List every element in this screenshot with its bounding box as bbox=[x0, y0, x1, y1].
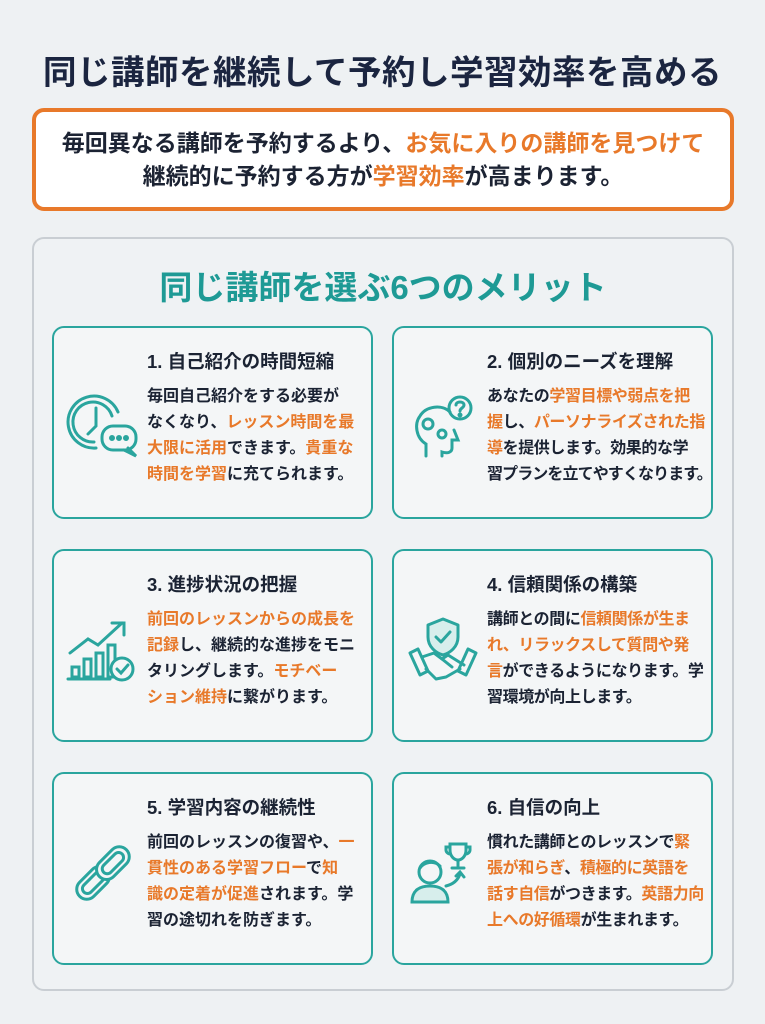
card 3 text: タリングします。モチベー bbox=[147, 663, 337, 680]
card 4 text: れ、リラックスして質問や発 bbox=[487, 637, 689, 654]
intro callout: 毎回異なる講師を予約するより、お気に入りの講師を見つけて bbox=[62, 130, 704, 156]
card 6 bbox=[392, 772, 713, 965]
card 5 text: 識の定着が促進されます。学 bbox=[147, 886, 353, 903]
card 1 text: 時間を学習に充てられます。 bbox=[147, 466, 353, 483]
card 5 bbox=[52, 772, 373, 965]
card 2 bbox=[392, 326, 713, 519]
card 6 text: 慣れた講師とのレッスンで緊 bbox=[487, 834, 690, 851]
intro callout bbox=[32, 108, 734, 211]
card 4 text: 習環境が向上します。 bbox=[487, 689, 641, 706]
title: 同じ講師を継続して予約し学習効率を高める bbox=[43, 55, 722, 92]
card 2 text: 握し、パーソナライズされた指 bbox=[487, 414, 705, 431]
card 1 text: なくなり、レッスン時間を最 bbox=[147, 414, 354, 431]
card 2 text: 習プランを立てやすくなります。 bbox=[487, 466, 712, 483]
card 3 heading: 3. 進捗状況の把握 bbox=[147, 574, 297, 595]
panel heading: 同じ講師を選ぶ6つのメリット bbox=[159, 269, 607, 306]
card 4 text: 講師との間に信頼関係が生ま bbox=[487, 611, 690, 628]
icon: growth chart bbox=[66, 621, 134, 682]
card 4 bbox=[392, 549, 713, 742]
icon: handshake with shield bbox=[408, 618, 478, 680]
panel: merits bbox=[32, 237, 734, 991]
card 5 text: 前回のレッスンの復習や、一 bbox=[147, 834, 355, 851]
icon: head with gears bbox=[415, 396, 472, 458]
card 1 heading: 1. 自己紹介の時間短縮 bbox=[147, 351, 334, 372]
card 6 text: 話す自信がつきます。英語力向 bbox=[487, 886, 704, 903]
card 4 heading: 4. 信頼関係の構築 bbox=[487, 574, 637, 595]
card 2 heading: 2. 個別のニーズを理解 bbox=[487, 351, 673, 372]
card 4 text bbox=[487, 610, 704, 706]
card 3 text bbox=[147, 610, 355, 706]
card 3 bbox=[52, 549, 373, 742]
card 6 heading: 6. 自信の向上 bbox=[487, 797, 600, 818]
card 5 text: 貫性のある学習フローで知 bbox=[147, 860, 338, 877]
card 5 text: 習の途切れを防ぎます。 bbox=[147, 912, 321, 929]
card 1 text: 大限に活用できます。貴重な bbox=[147, 440, 353, 457]
card 3 text: ション維持に繋がります。 bbox=[147, 689, 337, 706]
card 1 text: 毎回自己紹介をする必要が bbox=[147, 388, 339, 405]
intro callout: 継続的に予約する方が学習効率が高まります。 bbox=[143, 163, 623, 189]
card 3 text: 前回のレッスンからの成長を bbox=[147, 611, 355, 628]
card 6 text: 上への好循環が生まれます。 bbox=[487, 912, 688, 929]
icon: clock and speech bubble bbox=[66, 394, 138, 458]
card 6 text bbox=[487, 833, 704, 929]
card 1 bbox=[52, 326, 373, 519]
card 1 text bbox=[147, 387, 354, 483]
card 5 text bbox=[147, 833, 355, 929]
icon: chain links bbox=[75, 845, 131, 901]
card 4 text: 言ができるようになります。学 bbox=[487, 663, 704, 680]
card 6 text: 張が和らぎ、積極的に英語を bbox=[487, 860, 689, 877]
icon: person with trophy bbox=[410, 842, 472, 904]
card 2 text: あなたの学習目標や弱点を把 bbox=[487, 388, 690, 405]
card 2 text: 導を提供します。効果的な学 bbox=[487, 440, 688, 457]
card 2 text bbox=[487, 387, 712, 483]
card 5 heading: 5. 学習内容の継続性 bbox=[147, 797, 316, 818]
card 3 text: 記録し、継続的な進捗をモニ bbox=[147, 637, 355, 654]
